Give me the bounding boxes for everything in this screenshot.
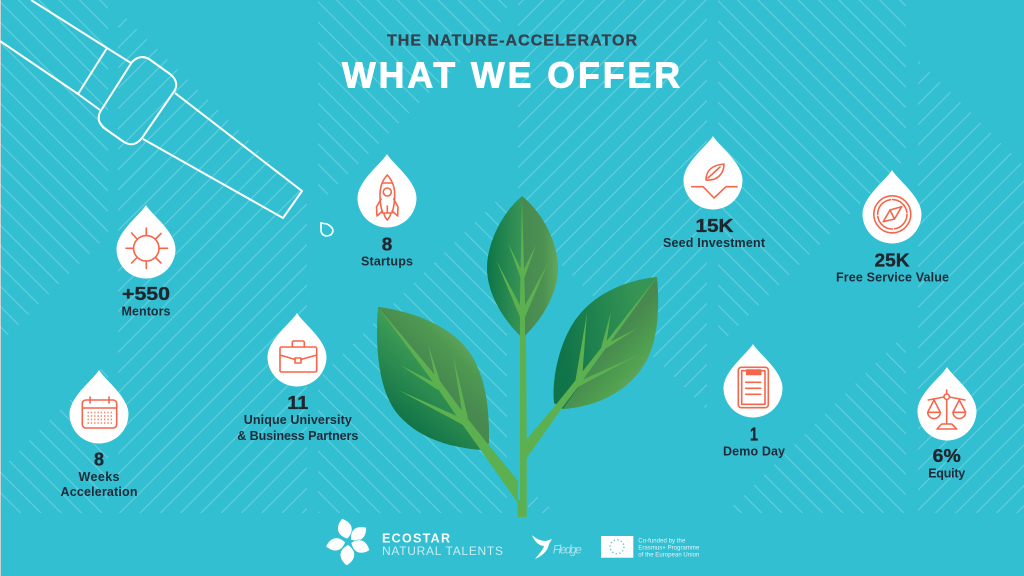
item: seed investment — [663, 136, 766, 250]
item: demo day — [723, 344, 785, 459]
label: Free Service Value — [836, 271, 949, 285]
label: Equity — [928, 467, 965, 481]
centre leaf — [487, 196, 558, 340]
drop badge — [116, 205, 176, 278]
eu co-funding text: Co-funded by the — [638, 538, 686, 544]
label: Mentors — [122, 305, 171, 319]
illustration: green plant — [377, 196, 658, 517]
value: 6% — [933, 445, 961, 466]
item: mentors — [116, 205, 176, 319]
item: weeks acceleration: Acceleration — [60, 485, 138, 499]
item: partners: & Business Partners — [237, 429, 358, 443]
logo text: ecostar: ECOSTAR — [382, 531, 450, 545]
label: Seed Investment — [663, 236, 766, 250]
plant stem and branches — [378, 277, 657, 517]
drop badge — [268, 313, 326, 386]
value: 25K — [874, 250, 910, 271]
subtitle: THE NATURE-ACCELERATOR — [387, 33, 637, 50]
icon: balance scales — [928, 390, 966, 429]
icon: sun — [126, 228, 168, 268]
title block — [342, 33, 683, 95]
icon: briefcase — [280, 341, 317, 372]
item: startups — [358, 154, 416, 269]
label: Demo Day — [723, 445, 785, 459]
item: partners — [237, 313, 358, 443]
drop badge — [918, 367, 976, 440]
value: +550 — [122, 283, 170, 304]
item: free service value — [836, 170, 949, 285]
label: Unique University — [244, 413, 352, 427]
logo: eu flag — [601, 536, 633, 558]
drop badge — [862, 170, 922, 244]
value: 11 — [287, 392, 308, 413]
logo text: natural talents: NATURAL TALENTS — [382, 544, 503, 558]
value: 1 — [750, 424, 758, 445]
eu co-funding text: Erasmus+ Programme — [638, 545, 700, 551]
item: equity — [918, 367, 976, 481]
main heading: WHAT WE OFFER — [342, 54, 683, 95]
footer logos — [324, 517, 700, 566]
icon: clipboard — [738, 367, 768, 408]
value: 8 — [94, 449, 104, 470]
left leaf — [377, 307, 489, 450]
item: weeks acceleration — [60, 370, 138, 499]
icon: falling water drop outline — [321, 223, 333, 236]
icon: rocket — [376, 175, 398, 220]
icon: pipette outline — [0, 0, 302, 218]
right leaf — [554, 277, 658, 409]
eu co-funding text: of the European Union — [638, 553, 699, 559]
value: 8 — [382, 234, 392, 255]
logo: ecostar star of leaves — [324, 517, 372, 566]
drop badge — [358, 154, 416, 228]
drop badge — [684, 136, 742, 210]
logo: fledge bird — [532, 535, 552, 559]
drop badge — [724, 344, 782, 418]
value: 15K — [696, 215, 734, 236]
icon: compass — [874, 196, 911, 233]
icon: seedling leaf in ground — [692, 164, 737, 198]
label: Weeks — [78, 470, 120, 484]
drop badge — [70, 370, 128, 444]
icon: calendar — [82, 397, 117, 428]
logo text: fledge: Fledge — [553, 542, 582, 556]
eu co-funding text — [638, 538, 700, 559]
label: Startups — [361, 255, 413, 269]
